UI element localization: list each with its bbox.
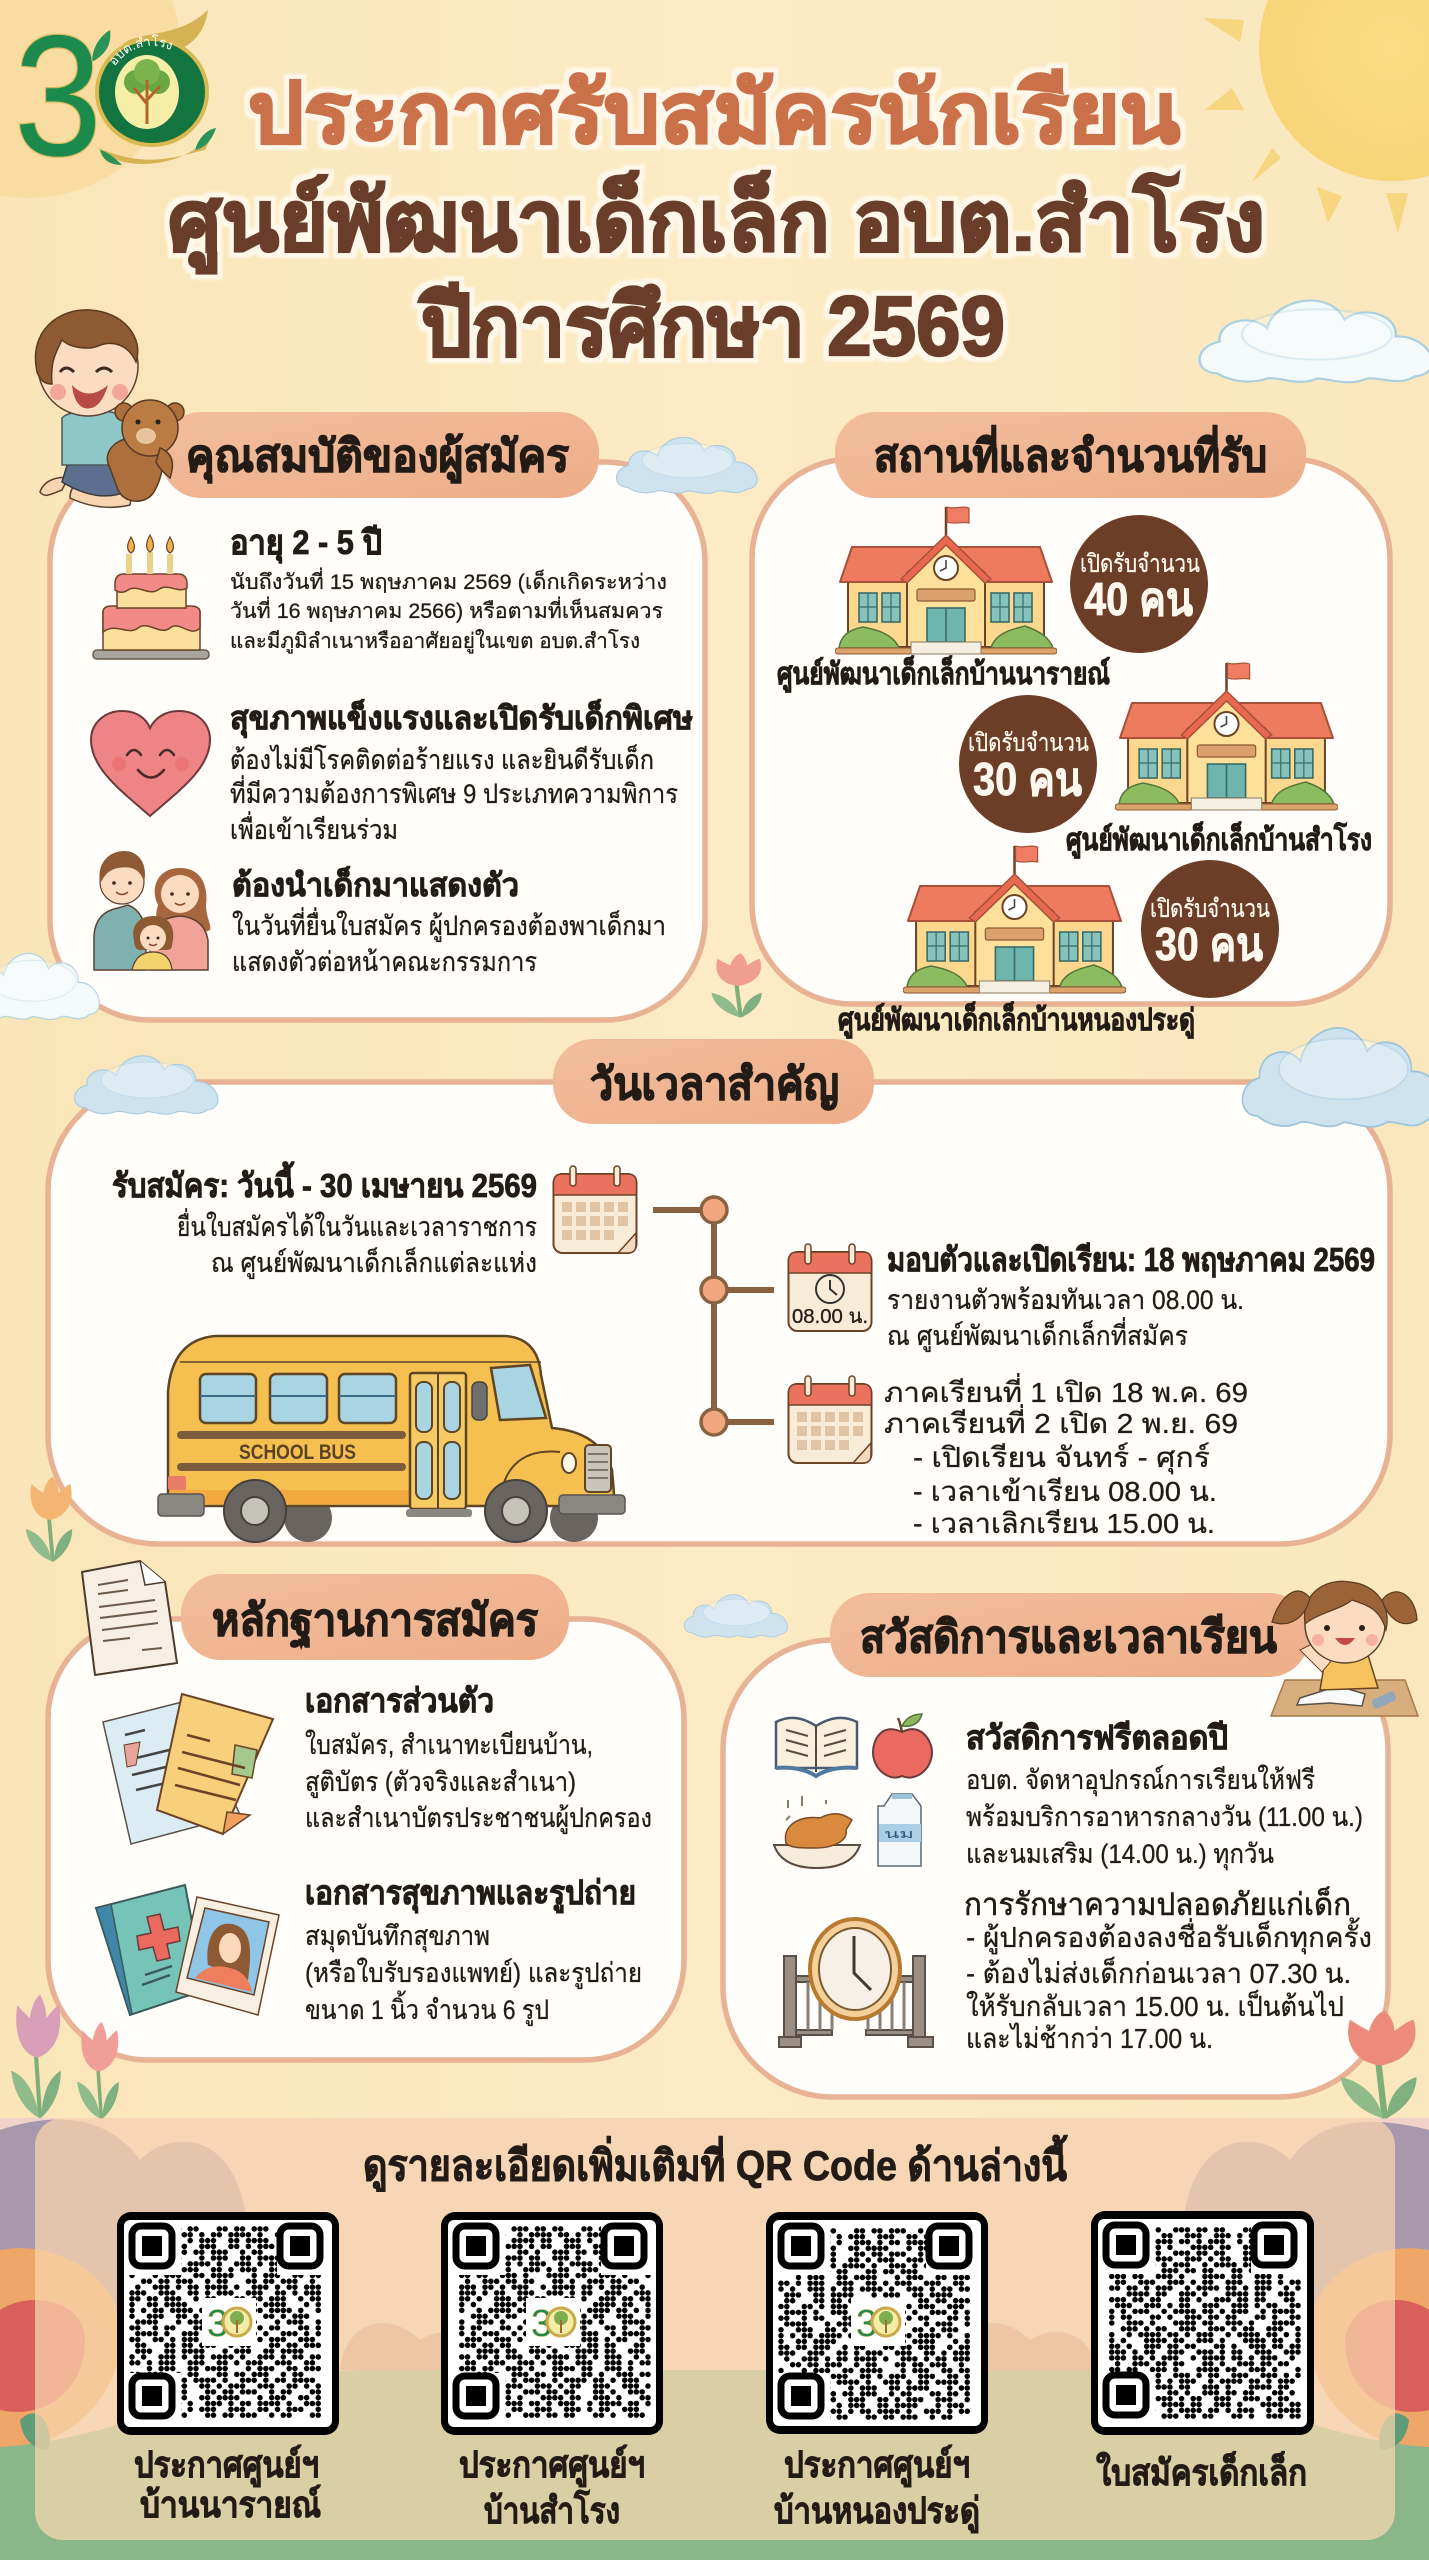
QR code 4	[1091, 2211, 1314, 2435]
text: free welfare	[966, 1764, 1363, 1871]
icon: calendar 1	[554, 1166, 636, 1253]
text: semester details: - เปิดเรียน จันทร์ - ศุกร์	[913, 1442, 1210, 1475]
text: enrolment	[887, 1241, 1375, 1352]
pill heading: welfare	[830, 1593, 1309, 1677]
icon: personal documents	[103, 1694, 273, 1844]
text: child safety: - ต้องไม่ส่งเด็กก่อนเวลา 07.30 น.	[966, 1956, 1351, 1989]
text: bring child details: แสดงตัวต่อหน้าคณะกรรมการ	[232, 947, 537, 977]
icon: family	[94, 851, 210, 970]
icon: calendar 3	[788, 1376, 872, 1463]
text: health documents: สมุดบันทึกสุขภาพ	[305, 1921, 490, 1953]
text: semester details: - เวลาเลิกเรียน 15.00 น.	[913, 1508, 1215, 1539]
tulip bottom right	[1340, 2010, 1416, 2118]
text: health details: ต้องไม่มีโรคติดต่อร้ายแรง และยินดีรับเด็ก	[230, 742, 654, 775]
emblem ring text: อบต.สำโรง	[110, 34, 172, 66]
pill heading: key dates	[553, 1039, 874, 1124]
text: free welfare: อบต. จัดหาอุปกรณ์การเรียนให้ฟรี	[966, 1764, 1315, 1797]
panel: application documents	[48, 1574, 684, 2060]
badge: 30 seats	[959, 695, 1097, 833]
illustration: girl studying at desk	[1271, 1581, 1418, 1716]
icon: health book and photo	[96, 1885, 279, 2015]
QR 1 caption	[134, 2444, 321, 2525]
icon: milk carton	[878, 1794, 921, 1866]
QR 3 caption: บ้านหนองประดู่	[774, 2490, 980, 2534]
pill heading: documents	[181, 1574, 569, 1660]
panel: QR codes	[35, 2118, 1395, 2540]
text: free welfare: และนมเสริม (14.00 น.) ทุกวัน	[966, 1839, 1274, 1871]
illustration: boy hugging teddy bear	[35, 310, 184, 507]
text: health documents	[305, 1921, 642, 2026]
badge: 40 seats: เปิดรับจำนวน	[1080, 550, 1200, 578]
text: bring child details: ในวันที่ยื่นใบสมัคร ผู้ปกครองต้องพาเด็กมา	[232, 907, 666, 942]
cloud left middle	[0, 953, 99, 1020]
bottom scenery background	[0, 2118, 1429, 2560]
text: semester details: ภาคเรียนที่ 2 เปิด 2 พ.ย. 69	[884, 1404, 1238, 1439]
QR 3 caption: ประกาศศูนย์ฯ	[784, 2444, 970, 2488]
tulip pink middle	[711, 953, 762, 1017]
heading: bring child: ต้องนำเด็กมาแสดงตัว	[232, 865, 519, 903]
cloud top right	[1200, 301, 1429, 382]
numeral three: 3	[14, 0, 102, 192]
pill heading: documents: หลักฐานการสมัคร	[212, 1596, 538, 1648]
text: free welfare: พร้อมบริการอาหารกลางวัน (11.00 น.)	[966, 1802, 1363, 1832]
school building 1	[835, 507, 1057, 654]
text: enrolment: ณ ศูนย์พัฒนาเด็กเล็กที่สมัคร	[887, 1317, 1188, 1352]
QR 4 caption: ใบสมัครเด็กเล็ก	[1096, 2450, 1307, 2493]
heading: child safety: การรักษาความปลอดภัยแก่เด็ก	[964, 1886, 1351, 1922]
heading: personal documents: เอกสารส่วนตัว	[305, 1682, 494, 1719]
pill heading: key dates: วันเวลาสำคัญ	[590, 1060, 839, 1110]
timeline connector	[653, 1197, 774, 1435]
text: application period: ยื่นใบสมัครได้ในวันและเวลาราชการ	[177, 1208, 537, 1242]
school building 3	[903, 846, 1126, 993]
cloud between panels	[617, 437, 757, 493]
illustration: school bus: SCHOOL BUS	[239, 1441, 356, 1464]
heading: QR section: ดูรายละเอียดเพิ่มเติมที่ QR Code ด้านล่างนี้	[363, 2134, 1068, 2192]
QR 2 caption	[459, 2444, 645, 2531]
emblem tree	[124, 59, 170, 124]
panel: applicant qualifications	[50, 412, 705, 1020]
text: application period: รับสมัคร: วันนี้ - 30 เมษายน 2569	[112, 1161, 537, 1204]
text: application period	[112, 1161, 537, 1279]
text: personal documents	[305, 1729, 652, 1834]
pill heading: qualifications	[161, 412, 599, 498]
icon: birthday cake	[93, 535, 209, 659]
text: semester details: - เวลาเข้าเรียน 08.00 น.	[913, 1476, 1217, 1507]
text: child safety: ให้รับกลับเวลา 15.00 น. เป็นต้นไป	[966, 1989, 1344, 2022]
QR 1 caption: ประกาศศูนย์ฯ	[134, 2444, 319, 2488]
text: child safety: และไม่ช้ากว่า 17.00 น.	[966, 2023, 1213, 2054]
text: semester details	[884, 1373, 1248, 1539]
illustration: school bus	[158, 1336, 625, 1542]
text: application period: ณ ศูนย์พัฒนาเด็กเล็กแต่ละแห่ง	[211, 1245, 537, 1279]
pill heading: locations: สถานที่และจำนวนที่รับ	[874, 425, 1267, 481]
text: bring child details	[232, 907, 666, 977]
badge: 30 seats: เปิดรับจำนวน	[1150, 895, 1270, 923]
cloud lower middle	[684, 1595, 788, 1637]
QR 3 caption	[774, 2444, 980, 2534]
QR 2 caption: บ้านสำโรง	[484, 2489, 620, 2531]
title line 3: ปีการศึกษา 2569	[418, 279, 1005, 373]
text: age details	[230, 567, 667, 654]
emblem circle	[95, 37, 209, 147]
icon: calendar with clock: 08.00 น.	[792, 1306, 868, 1328]
title line 1: ประกาศรับสมัครนักเรียน	[248, 66, 1180, 160]
icon: milk carton: นม	[884, 1827, 914, 1841]
badge: 30 seats: 30 คน	[1155, 918, 1263, 970]
label: Ban Narai: ศูนย์พัฒนาเด็กเล็กบ้านนารายณ์	[777, 655, 1110, 693]
text: child safety	[966, 1917, 1372, 2054]
text: enrolment: รายงานตัวพร้อมทันเวลา 08.00 น.	[887, 1285, 1244, 1315]
QR code 2	[441, 2212, 663, 2435]
icon: paper document	[82, 1561, 177, 1675]
tulip orange left	[26, 1477, 72, 1561]
QR 1 caption: บ้านนารายณ์	[140, 2484, 321, 2525]
cloud timeline right	[1242, 1028, 1429, 1127]
badge: 40 seats: 40 คน	[1084, 573, 1193, 625]
icon: smiling heart	[91, 711, 210, 816]
pill heading: qualifications: คุณสมบัติของผู้สมัคร	[186, 432, 569, 484]
text: age details: และมีภูมิลำเนาหรืออาศัยอยู่ในเขต อบต.สำโรง	[230, 629, 640, 654]
QR code 3	[766, 2212, 988, 2434]
text: personal documents: สูติบัตร (ตัวจริงและสำเนา)	[305, 1767, 576, 1798]
text: health documents: (หรือใบรับรองแพทย์) และรูปถ่าย	[305, 1957, 642, 1989]
QR code 1	[117, 2212, 339, 2435]
icon: calendar with clock	[788, 1244, 872, 1331]
pill heading: welfare: สวัสดิการและเวลาเรียน	[860, 1613, 1277, 1662]
text: semester details: ภาคเรียนที่ 1 เปิด 18 พ.ค. 69	[884, 1373, 1248, 1408]
text: health documents: ขนาด 1 นิ้ว จำนวน 6 รูป	[305, 1990, 549, 2026]
heading: age: อายุ 2 - 5 ปี	[230, 524, 382, 564]
school building 2	[1115, 663, 1338, 810]
icon: open book	[776, 1718, 857, 1776]
title line 2: ศูนย์พัฒนาเด็กเล็ก อบต.สำโรง	[168, 170, 1265, 274]
text: health details: ที่มีความต้องการพิเศษ 9 ประเภทความพิการ	[230, 775, 678, 809]
gold swoosh ornaments	[98, 10, 212, 164]
panel: locations and capacity	[752, 412, 1390, 1039]
heading: free welfare: สวัสดิการฟรีตลอดปี	[966, 1719, 1228, 1756]
decorative sun left	[0, 0, 180, 198]
text: health details: เพื่อเข้าเรียนร่วม	[230, 811, 398, 845]
text: health details	[230, 742, 678, 845]
badge: 30 seats: 30 คน	[973, 753, 1082, 805]
text: age details: นับถึงวันที่ 15 พฤษภาคม 2569 (เด็กเกิดระหว่าง	[230, 567, 667, 594]
badge: 40 seats	[1070, 515, 1208, 653]
panel: important dates	[48, 1039, 1390, 1544]
text: age details: วันที่ 16 พฤษภาคม 2566) หรือตามที่เห็นสมควร	[230, 596, 663, 623]
decorative sun right with rays	[1203, 0, 1429, 233]
text: personal documents: ใบสมัคร, สำเนาทะเบียนบ้าน,	[305, 1729, 593, 1760]
heading: health: สุขภาพแข็งแรงและเปิดรับเด็กพิเศษ	[230, 698, 693, 739]
label: Ban Nong Pradu: ศูนย์พัฒนาเด็กเล็กบ้านหนองประดู่	[838, 1001, 1195, 1039]
icon: clock and gate	[779, 1919, 933, 2047]
green leaves	[92, 30, 216, 165]
logo: 30th anniversary emblem	[14, 0, 216, 192]
icon: roast chicken	[774, 1796, 860, 1868]
cloud timeline left	[75, 1056, 218, 1114]
text: personal documents: และสำเนาบัตรประชาชนผู้ปกครอง	[305, 1803, 652, 1834]
badge: 30 seats	[1141, 860, 1279, 998]
tulip group bottom left	[11, 1995, 119, 2119]
text: child safety: - ผู้ปกครองต้องลงชื่อรับเด็กทุกครั้ง	[966, 1917, 1372, 1955]
panel: welfare and study hours	[723, 1593, 1388, 2097]
pill heading: locations	[835, 412, 1306, 498]
heading: health documents: เอกสารสุขภาพและรูปถ่าย	[305, 1874, 636, 1914]
badge: 30 seats: เปิดรับจำนวน	[968, 729, 1089, 757]
QR 2 caption: ประกาศศูนย์ฯ	[459, 2444, 645, 2488]
icon: apple	[873, 1714, 932, 1778]
